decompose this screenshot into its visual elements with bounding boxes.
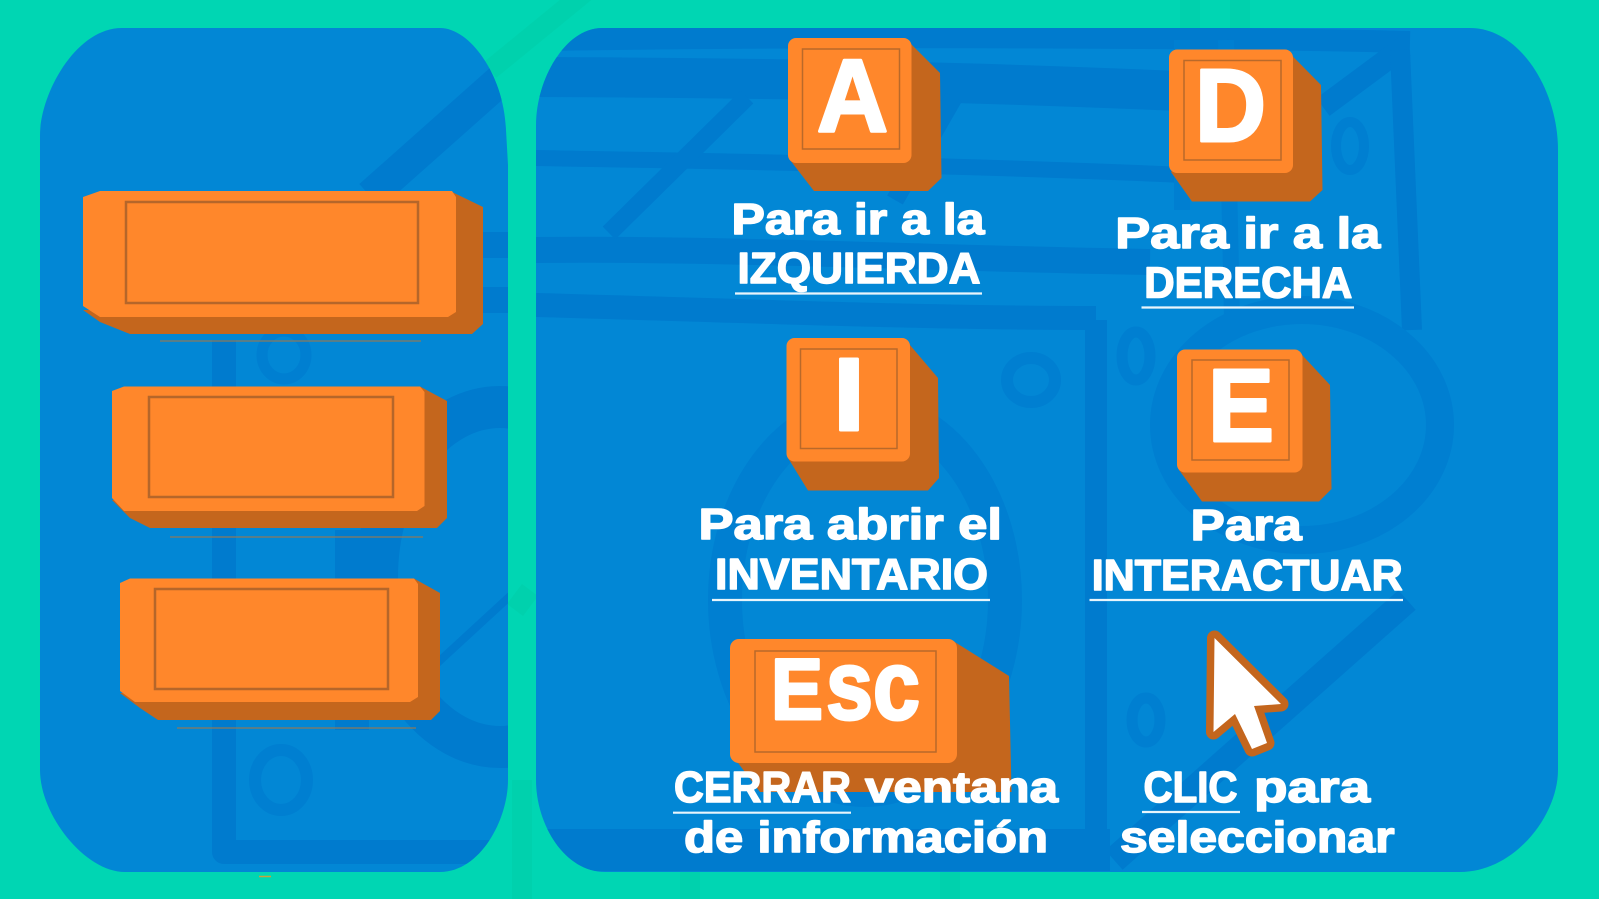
text: clic: CLIC xyxy=(1144,763,1238,812)
text: clic xyxy=(1120,763,1394,862)
text: izquierda xyxy=(732,195,985,294)
text: cerrar xyxy=(673,763,1059,862)
text: clic: para xyxy=(1254,763,1371,812)
key: blank large xyxy=(83,191,483,334)
key: A: A xyxy=(817,38,888,153)
text: cerrar: CERRAR xyxy=(674,763,851,812)
key: Esc: E xyxy=(771,642,823,738)
panel: right xyxy=(536,28,1558,872)
key: D xyxy=(1169,48,1322,202)
panel: left xyxy=(40,28,508,872)
text: cerrar: de información xyxy=(684,813,1048,862)
text: clic: seleccionar xyxy=(1120,813,1394,862)
key: I xyxy=(786,337,939,490)
icon: mouse cursor xyxy=(1214,638,1281,749)
text: derecha: DERECHA xyxy=(1144,258,1352,308)
text: inventario: Para abrir el xyxy=(698,500,1002,549)
text: inventario: INVENTARIO xyxy=(715,550,988,599)
text: inventario xyxy=(698,500,1002,600)
text: izquierda: IZQUIERDA xyxy=(738,244,980,293)
text: derecha xyxy=(1115,209,1381,308)
key: E xyxy=(1177,348,1332,502)
key: E: E xyxy=(1208,348,1274,463)
text: izquierda: Para ir a la xyxy=(732,195,985,244)
key: A xyxy=(788,38,942,191)
text: interactuar xyxy=(1090,501,1403,600)
text: derecha: Para ir a la xyxy=(1115,209,1381,258)
text: interactuar: Para xyxy=(1191,501,1302,550)
key: Esc xyxy=(730,630,1012,792)
key: D: D xyxy=(1195,48,1266,163)
key: I: I xyxy=(833,337,865,452)
text: interactuar: INTERACTUAR xyxy=(1092,551,1403,600)
key: blank small xyxy=(120,578,440,720)
key: Esc: sc xyxy=(826,630,920,740)
text: cerrar: ventana xyxy=(865,763,1059,812)
key: blank medium xyxy=(112,386,447,528)
